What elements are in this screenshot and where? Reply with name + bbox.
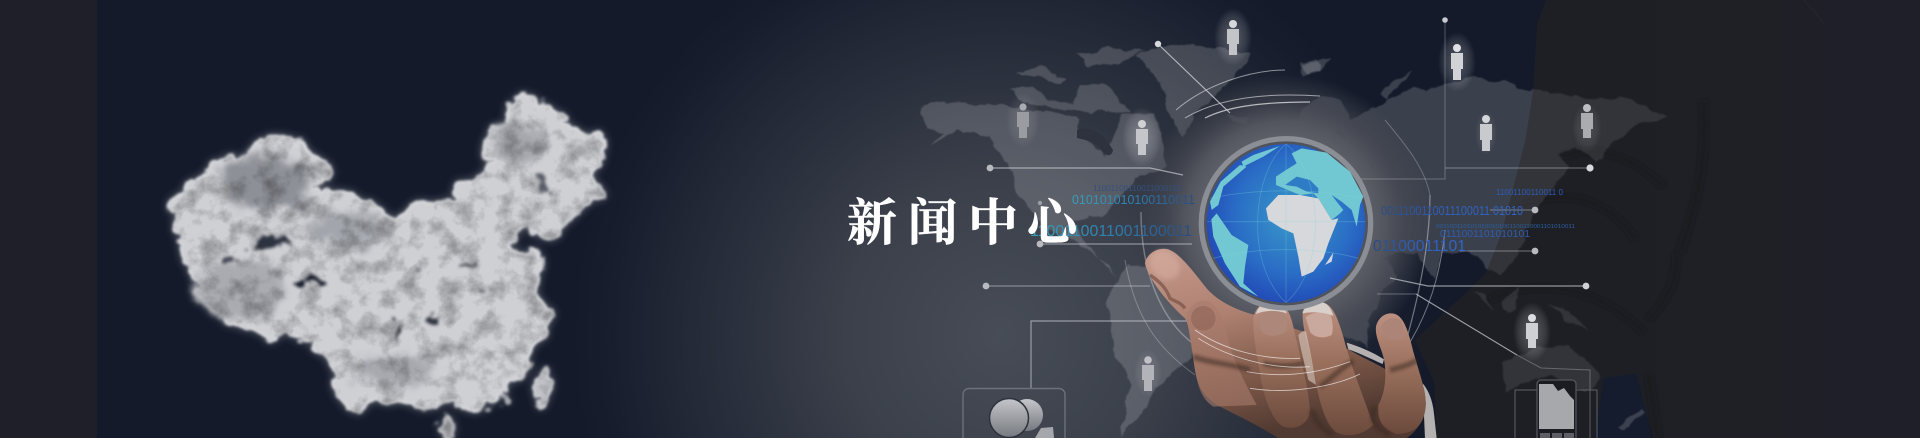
thumb crease shade	[1150, 275, 1185, 308]
icon: phone box	[1515, 380, 1597, 438]
binary code text	[1030, 184, 1575, 255]
light arcs on palm	[1195, 330, 1360, 390]
globe rim	[1199, 136, 1373, 311]
Africa	[1266, 195, 1338, 277]
cloud map of China	[162, 90, 611, 434]
person icon 4	[1134, 349, 1162, 397]
palm highlight	[1298, 331, 1316, 385]
binary code text: 01100011101	[1373, 238, 1466, 255]
hand	[1144, 245, 1437, 438]
orbit rings around globe	[1125, 70, 1445, 375]
person icon 5	[1438, 32, 1476, 92]
person icons	[1006, 8, 1602, 397]
world map	[922, 43, 1668, 438]
finger creases	[1193, 357, 1417, 435]
grid lines	[1207, 144, 1365, 303]
person icon 3	[1122, 107, 1162, 167]
person icon 7	[1572, 104, 1602, 152]
person icon 2	[1006, 92, 1040, 148]
fingers	[1253, 301, 1310, 428]
cyan lands	[1210, 146, 1363, 297]
map: Americas and Greenland	[922, 43, 1320, 438]
translucent index fingertip	[1187, 301, 1257, 407]
binary code text: 11001100110011000110	[1093, 184, 1182, 193]
suit sleeve	[1415, 0, 1824, 438]
binary code text: 0111001101010101	[1440, 228, 1530, 240]
title: 新闻中心: 新闻中心	[847, 183, 1083, 255]
binary code text: 1100110011001100011	[1030, 223, 1192, 240]
person icon 6	[1475, 111, 1497, 155]
inland sea	[1285, 177, 1318, 193]
palm and thumb	[1145, 249, 1425, 438]
binary code text: 0011100110011100011 01010	[1381, 203, 1523, 218]
finger nails	[1258, 311, 1404, 340]
globe	[1199, 136, 1373, 311]
ocean	[1207, 144, 1365, 303]
binary code text: 11001100110011 0	[1496, 188, 1564, 197]
thumb highlight	[1144, 245, 1186, 285]
shirt cuff	[1347, 343, 1437, 438]
person icon 8	[1513, 302, 1551, 362]
binary code text: 0011001101010100101001100110001101010011	[1436, 224, 1575, 230]
suit shade over map	[1415, 0, 1824, 438]
Hudson Bay	[1077, 129, 1113, 155]
connector lines and dots	[983, 17, 1594, 438]
binary code text: 010101010100110011	[1072, 192, 1195, 207]
map: Eurasia, Africa and Oceania	[1300, 58, 1668, 428]
person icon 1	[1214, 8, 1252, 66]
icon: people box	[963, 388, 1065, 438]
